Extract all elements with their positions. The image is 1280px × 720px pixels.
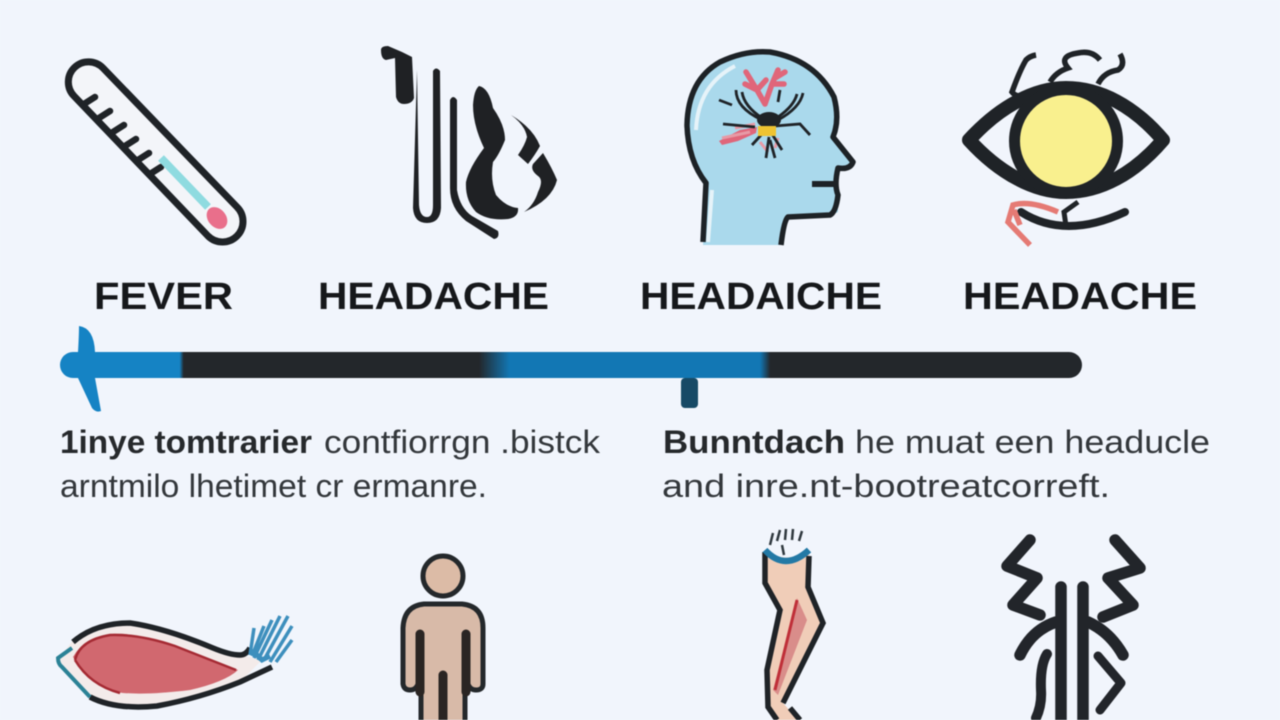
text block: left: 1inye tomtrarier — [60, 424, 312, 460]
label: headache 2: HEADACHE — [963, 276, 1197, 318]
text block: left: contfiorrgn .bistck — [324, 424, 601, 460]
text block: right: Bunntdach — [663, 424, 845, 460]
icon: forearm with muscle — [765, 529, 823, 720]
icon: spine with nerve pain — [1007, 540, 1140, 720]
icon: eye with yellow iris — [969, 52, 1163, 245]
icon: muscle with nerve fringe — [58, 616, 292, 707]
text block: right: he muat een headucle — [855, 424, 1210, 460]
text block: right: and inre.nt-bootreatcorreft. — [662, 468, 1110, 504]
timeline bar — [60, 326, 1082, 412]
text block: right — [662, 424, 1210, 504]
text block: left: arntmilo lhetimet cr ermanre. — [60, 468, 487, 504]
icon: head with brain pain — [687, 52, 853, 245]
icon: thermometer — [68, 62, 243, 242]
text block: left — [60, 424, 601, 504]
label: headache 1: HEADACHE — [318, 276, 549, 318]
icon: standing person — [403, 556, 483, 720]
icon: abstract nasal lines — [381, 46, 557, 239]
label: fever: FEVER — [94, 276, 233, 318]
label: headaiche: HEADAICHE — [640, 276, 882, 318]
